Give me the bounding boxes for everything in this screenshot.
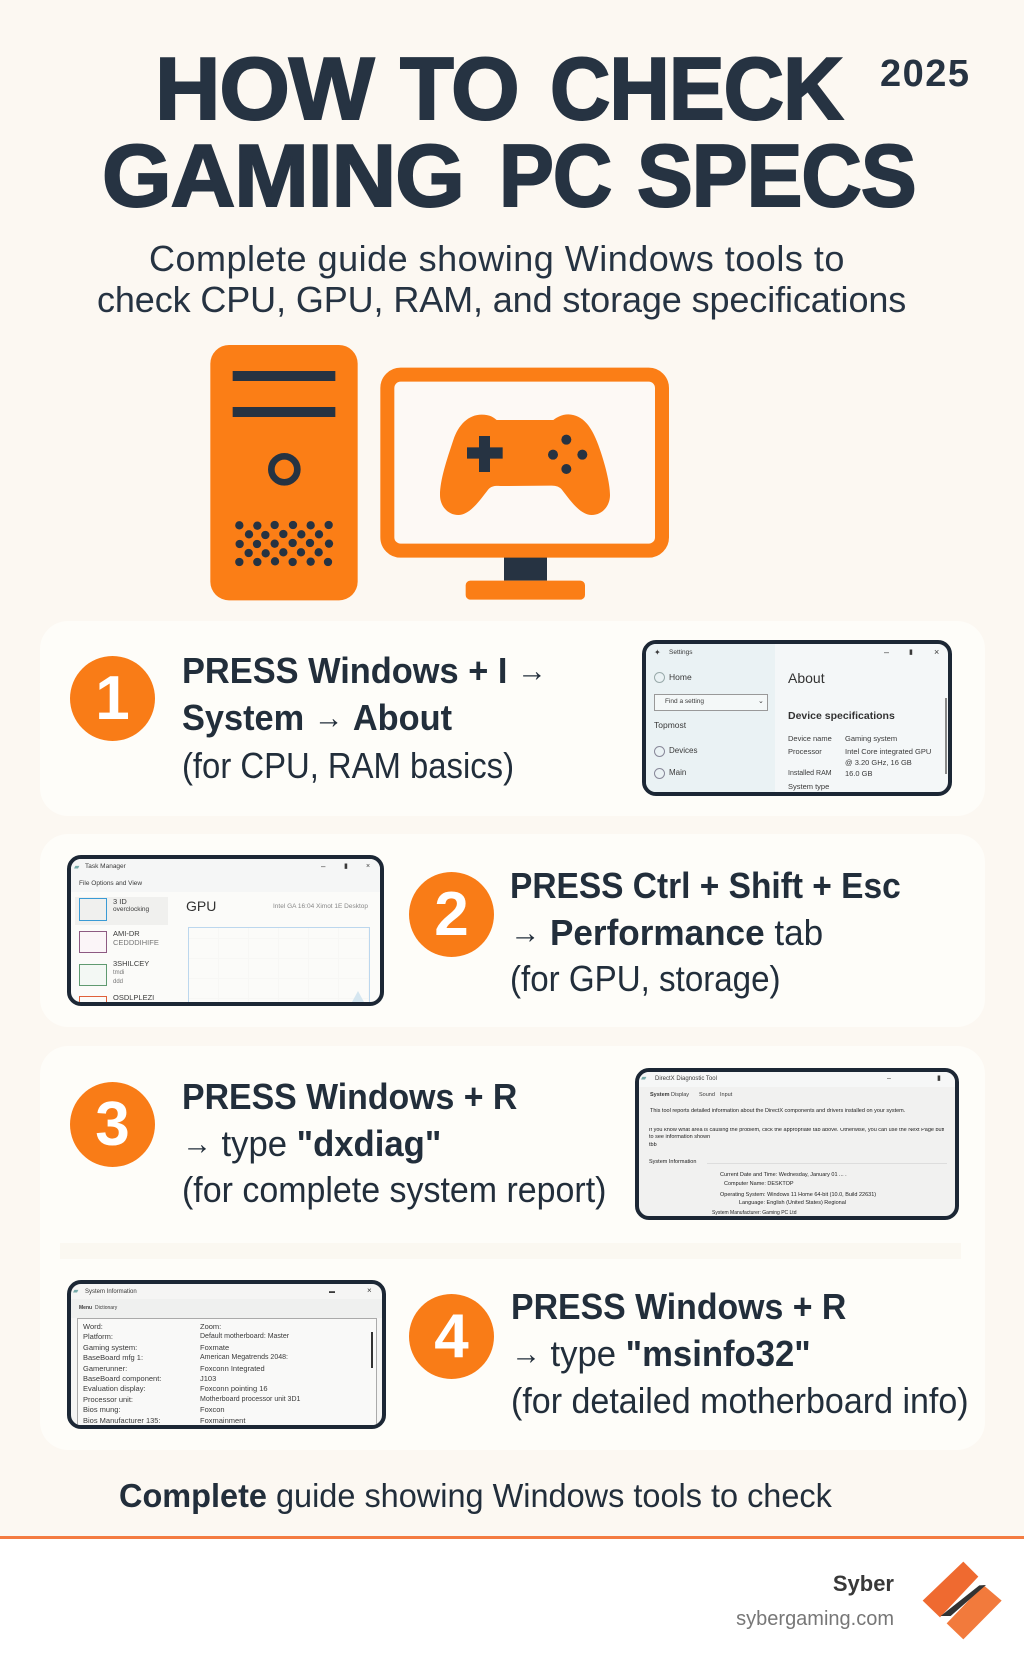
screenshot: Task Manager GPU: × (366, 863, 370, 870)
screenshot: Windows settings About: Device specifications (788, 710, 895, 722)
screenshot: Task Manager GPU: Intel GA 16:04 Ximot 1E Desktop (273, 903, 368, 910)
step 1 text: PRESS Windows + I → (182, 650, 547, 690)
screenshot: System Information: Evaluation display: (83, 1384, 146, 1393)
screenshot: DirectX Diagnostic Tool: System Manufacturer: Gaming PC Ltd (712, 1210, 796, 1216)
year badge: 2025 (880, 53, 971, 95)
screenshot: DirectX Diagnostic Tool: Computer Name: DESKTOP (724, 1181, 794, 1187)
screenshot: Windows settings About: System type (788, 782, 829, 791)
step 2 number (409, 872, 494, 957)
screenshot: System Information: Bios Manufacturer 135: (83, 1416, 161, 1425)
footer (0, 1536, 1024, 1666)
step 3 number (70, 1082, 155, 1167)
screenshot: Windows settings About: Main (669, 768, 686, 777)
screenshot: Task Manager GPU: overclocking (113, 906, 149, 913)
screenshot: System Information: × (367, 1286, 372, 1295)
screenshot: DirectX Diagnostic Tool: Sound (699, 1092, 715, 1098)
screenshot: System Information: Foxconn pointing 16 (200, 1384, 268, 1393)
step 3 text: (for complete system report) (182, 1169, 606, 1210)
screenshot: System Information: Foxcon (200, 1405, 225, 1414)
step 2 text (510, 865, 901, 999)
screenshot: Task Manager GPU: – (321, 862, 325, 871)
screenshot: Windows settings About: ▮ (909, 649, 913, 656)
screenshot: Task Manager GPU: 3SHILCEY (113, 959, 149, 968)
screenshot: DirectX Diagnostic Tool: System Information (649, 1159, 696, 1165)
icon: PC tower and monitor with gamepad (210, 345, 669, 600)
screenshot: DirectX Diagnostic Tool (635, 1068, 959, 1220)
screenshot: Windows settings About: Topmost (654, 720, 686, 730)
title: HOW (155, 39, 373, 138)
screenshot: Windows settings About: 16.0 GB (845, 769, 873, 778)
step 4 number (409, 1294, 494, 1379)
brand name: Syber (833, 1571, 894, 1596)
step 3 text: → type "dxdiag" (182, 1123, 441, 1164)
screenshot: Task Manager GPU: 3 ID (113, 897, 127, 906)
screenshot: System Information: BaseBoard component: (83, 1374, 161, 1383)
screenshot: System Information: ▬ (329, 1289, 335, 1295)
screenshot: Windows settings About: Settings (669, 649, 692, 656)
screenshot: Task Manager GPU: CEDDDIHIFE (113, 938, 159, 947)
screenshot: Task Manager GPU (67, 855, 384, 1006)
step 3 number: 3 (95, 1090, 130, 1159)
screenshot: System Information: Gaming system: (83, 1343, 137, 1352)
panel: step 1 (40, 621, 985, 816)
screenshot: DirectX Diagnostic Tool: – (887, 1075, 891, 1082)
screenshot: System Information: Word: (83, 1322, 103, 1331)
screenshot: Windows settings About: – (884, 647, 889, 657)
panel: steps 3 and 4 (40, 1046, 985, 1450)
screenshot: System Information (67, 1280, 386, 1429)
screenshot: System Information: Dictionary (95, 1305, 117, 1311)
screenshot: DirectX Diagnostic Tool: System (650, 1092, 670, 1098)
screenshot: DirectX Diagnostic Tool: Current Date and Time: Wednesday, January 01 ... . (720, 1172, 847, 1178)
screenshot: Windows settings About: Processor (788, 747, 822, 756)
screenshot: Task Manager GPU: Task Manager (85, 863, 126, 870)
title: CHECK (550, 39, 843, 138)
screenshot: System Information: System Information (85, 1289, 137, 1295)
screenshot: System Information: Platform: (83, 1332, 113, 1341)
screenshot: Windows settings About: Home (669, 672, 692, 682)
screenshot: Windows settings About: × (934, 647, 939, 657)
icon: PC tower (210, 345, 358, 600)
screenshot: DirectX Diagnostic Tool: This tool reports detailed information about the DirectX components and drivers installed on your system. (650, 1108, 905, 1114)
step 4 text: PRESS Windows + R (511, 1286, 846, 1327)
screenshot: DirectX Diagnostic Tool: Display (671, 1092, 689, 1098)
step 4 text: (for detailed motherboard info) (511, 1380, 969, 1421)
title: SPECS (637, 126, 916, 224)
screenshot: Windows settings About: @ 3.20 GHz, 16 GB (845, 758, 912, 767)
step 2 number: 2 (434, 880, 469, 949)
icon: monitor (387, 375, 662, 600)
step 2 text: → Performance tab (510, 912, 823, 953)
title: PC (499, 126, 611, 224)
icon: Syber logo (922, 1562, 1002, 1640)
screenshot: System Information: BaseBoard mfg 1: (83, 1353, 143, 1362)
step 4 text (511, 1286, 969, 1421)
subtitle: Complete guide showing Windows tools to (149, 238, 845, 279)
screenshot: DirectX Diagnostic Tool: DirectX Diagnostic Tool (655, 1076, 717, 1082)
screenshot: System Information: ▰ (73, 1288, 78, 1295)
screenshot: Task Manager GPU: ▰ (74, 864, 79, 871)
screenshot: DirectX Diagnostic Tool: Language: English (United States) Regional (739, 1200, 846, 1206)
step 2 text: (for GPU, storage) (510, 958, 781, 999)
screenshot: DirectX Diagnostic Tool: to see information shown (649, 1134, 710, 1140)
screenshot: Task Manager GPU: tmdi (113, 970, 124, 976)
screenshot: DirectX Diagnostic Tool: ▮ (937, 1075, 941, 1082)
step 1 number (70, 656, 155, 741)
screenshot: System Information: Foxconn Integrated (200, 1364, 265, 1373)
screenshot: Task Manager GPU: GPU (186, 898, 216, 914)
screenshot: DirectX Diagnostic Tool: Operating System: Windows 11 Home 64-bit (10.0, Build 22631) (720, 1192, 876, 1198)
step 1 number: 1 (95, 664, 130, 733)
screenshot: System Information: Motherboard processor unit 3D1 (200, 1396, 300, 1403)
screenshot: Windows settings About: Devices (669, 746, 697, 755)
step 4 number: 4 (434, 1302, 469, 1371)
title: TO (400, 39, 519, 138)
screenshot: DirectX Diagnostic Tool: ▰ (641, 1075, 646, 1082)
screenshot: System Information: Menu (79, 1305, 92, 1311)
screenshot: Windows settings About: About (788, 670, 825, 686)
screenshot: System Information: American Megatrends 2048: (200, 1354, 288, 1361)
screenshot: Windows settings About: Installed RAM (788, 770, 832, 777)
step 3 text: PRESS Windows + R (182, 1076, 517, 1117)
title: GAMING (102, 126, 464, 224)
screenshot: Windows settings About: Find a setting (665, 698, 704, 705)
screenshot: Task Manager GPU: ddd (113, 979, 123, 985)
brand url: sybergaming.com (736, 1608, 894, 1630)
screenshot: System Information: Zoom: (200, 1322, 221, 1331)
footer accent line (0, 1536, 1024, 1539)
screenshot: System Information: Processor unit: (83, 1395, 133, 1404)
step 3 text (182, 1076, 606, 1210)
closing note: Complete guide showing Windows tools to check (119, 1477, 832, 1514)
step 1 text: (for CPU, RAM basics) (182, 744, 514, 786)
screenshot: System Information: Foxmate (200, 1343, 229, 1352)
screenshot: Task Manager GPU: AMI-DR (113, 929, 140, 938)
subtitle (97, 238, 906, 320)
screenshot: DirectX Diagnostic Tool: tbb (649, 1142, 657, 1148)
step 1 text (182, 650, 547, 786)
panel: step 2 (40, 834, 985, 1027)
step 4 text: → type "msinfo32" (511, 1333, 811, 1374)
screenshot: Windows settings About: Device name (788, 734, 832, 743)
subtitle: check CPU, GPU, RAM, and storage specifications (97, 279, 906, 320)
screenshot: System Information: Gamerunner: (83, 1364, 127, 1373)
screenshot: Windows settings About: ⌄ (758, 698, 764, 705)
icon: gamepad (440, 414, 610, 515)
screenshot: Windows settings About: ✦ (654, 648, 661, 657)
screenshot: Task Manager GPU: OSDLPLEZI (113, 993, 154, 1002)
screenshot: System Information: Foxmainment (200, 1416, 245, 1425)
title (102, 39, 916, 224)
screenshot: Windows settings About (642, 640, 952, 796)
screenshot: Windows settings About: Intel Core integrated GPU (845, 747, 931, 756)
step 1 text: System → About (182, 696, 452, 738)
screenshot: System Information: Bios mung: (83, 1405, 121, 1414)
screenshot: Windows settings About: Gaming system (845, 734, 897, 743)
step 2 text: PRESS Ctrl + Shift + Esc (510, 865, 901, 906)
screenshot: DirectX Diagnostic Tool: Input (720, 1092, 732, 1098)
screenshot: Task Manager GPU: ▮ (344, 863, 348, 870)
screenshot: System Information: J103 (200, 1374, 216, 1383)
screenshot: System Information: Default motherboard: Master (200, 1333, 289, 1340)
screenshot: Task Manager GPU: File Options and View (79, 880, 142, 887)
